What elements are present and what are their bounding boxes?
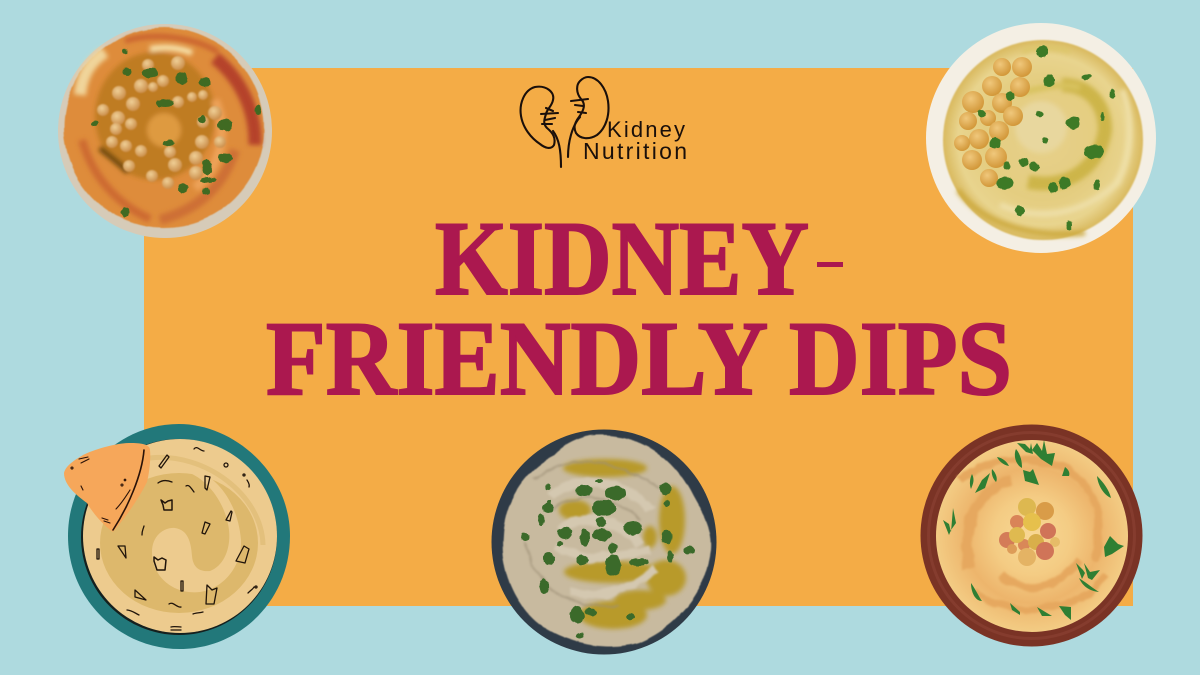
olive oil swirls xyxy=(958,48,1129,234)
parsley leaves xyxy=(943,440,1124,620)
icon: kidneys xyxy=(521,77,609,167)
cream hummus xyxy=(83,439,277,633)
faint outer arc xyxy=(150,457,263,545)
photo: classic hummus bowl, top right xyxy=(926,23,1156,253)
hummus xyxy=(936,440,1128,632)
darker spiral xyxy=(100,473,258,613)
chickpeas xyxy=(954,57,1032,187)
light folds xyxy=(550,482,655,594)
logo text: Nutrition: Nutrition xyxy=(583,138,687,164)
title line 1: KIDNEY xyxy=(435,200,809,317)
pita chip xyxy=(64,443,150,532)
logo text: Kidney: Kidney xyxy=(607,117,685,142)
parsley xyxy=(91,48,261,217)
title xyxy=(266,200,1012,417)
hummus xyxy=(64,28,264,228)
doodle toppings xyxy=(97,448,257,630)
title line 2: FRIENDLY DIPS xyxy=(266,300,1012,417)
title hyphen xyxy=(817,262,843,267)
rim highlight xyxy=(928,432,1134,638)
hummus xyxy=(943,40,1143,240)
photo: paprika hummus bowl, top left xyxy=(58,24,272,238)
logo: Kidney Nutrition xyxy=(521,77,687,167)
illustration: hummus with pita, bottom left xyxy=(64,424,290,649)
dark fold shading xyxy=(525,462,660,606)
chickpeas xyxy=(97,56,226,189)
photo: baba ganoush bowl, bottom centre xyxy=(492,430,716,654)
pita doodles xyxy=(71,450,144,530)
oil pools xyxy=(559,459,686,629)
terracotta bowl xyxy=(920,424,1142,646)
pool and swirls xyxy=(80,36,255,220)
dip xyxy=(503,435,711,647)
chickpeas xyxy=(999,498,1060,566)
bowl rim xyxy=(926,23,1156,253)
hummus outline xyxy=(81,439,277,635)
bowl rim xyxy=(58,24,272,238)
parsley xyxy=(521,479,695,639)
light swirl xyxy=(152,470,241,592)
dark bowl xyxy=(492,430,716,654)
illustration: hummus with leaves, bottom right xyxy=(920,424,1142,646)
teal bowl xyxy=(68,424,290,649)
orange panel xyxy=(144,68,1133,606)
swirls xyxy=(960,460,1105,610)
parsley xyxy=(978,45,1115,230)
